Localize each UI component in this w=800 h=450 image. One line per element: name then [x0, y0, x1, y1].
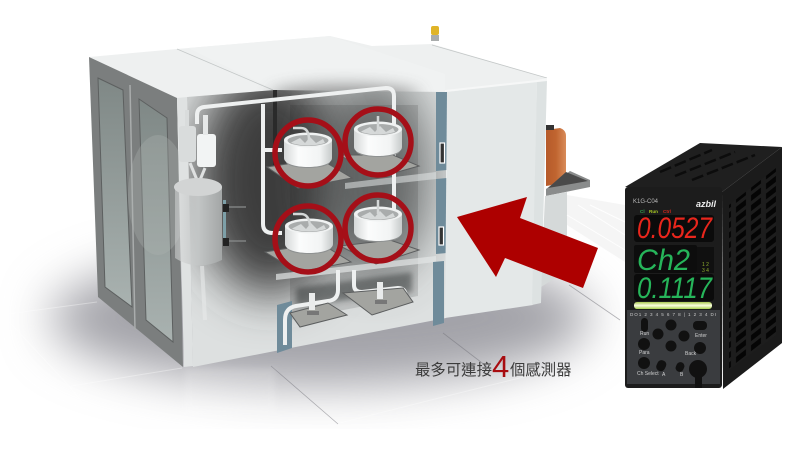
buttons: [638, 318, 707, 388]
button labels: Back: [685, 351, 697, 357]
LED bar: [634, 302, 712, 309]
button labels: B: [680, 372, 684, 378]
mesh grid floor: [567, 195, 625, 262]
button labels: Para: [639, 350, 650, 356]
caption: 個感測器: [510, 360, 572, 379]
controller: 3 4: [702, 268, 709, 274]
button labels: Run: [640, 331, 649, 337]
controller: 0.1117: [637, 272, 713, 305]
yellow beacon: [431, 26, 439, 35]
arrow: [457, 197, 598, 288]
orange tank: [546, 128, 566, 186]
controller: Ch2: [637, 244, 690, 277]
left cabinet doors: [89, 57, 193, 367]
controller top: [625, 143, 782, 192]
sensor inlet pipes: [293, 116, 378, 226]
button labels: [637, 331, 707, 378]
circle: sensor 4: [345, 195, 411, 261]
controller: 1 2: [702, 262, 709, 268]
tray and support: [546, 171, 590, 196]
green channel display: [634, 245, 697, 273]
circle: sensor 3: [275, 206, 341, 272]
green value display: [634, 274, 714, 301]
controller: 0.0527: [637, 212, 713, 245]
floor: [0, 250, 800, 450]
scale labels: DO1 2 3 4 5 6 7 8 | 1 2 3 4 DI: [630, 312, 716, 317]
controller: Run: [649, 209, 658, 214]
caption: [415, 349, 572, 384]
door handles: [440, 143, 444, 163]
button labels: A: [662, 372, 666, 378]
machine body with vignette: [174, 65, 447, 367]
controller: azbil: [696, 199, 717, 209]
circle: sensor 1: [275, 120, 341, 186]
circle: sensor 2: [345, 109, 411, 175]
pipes: [197, 88, 406, 345]
caption: 最多可連接: [415, 361, 492, 379]
machine: rear equipment: [541, 125, 625, 287]
red display: [634, 215, 714, 242]
button labels: Ch Select: [637, 371, 659, 377]
status labels: Cl: [640, 209, 645, 214]
controller: [625, 143, 782, 389]
top shadow: [270, 85, 420, 107]
small fittings: [307, 282, 387, 315]
controller side with vents: [722, 147, 782, 389]
sensors: [284, 122, 402, 254]
caption: 4: [492, 349, 509, 384]
shelves: [345, 172, 436, 189]
machine: top surfaces: [89, 26, 547, 107]
model and brand: K1G-C04: [633, 199, 659, 205]
controller front: [625, 187, 722, 388]
controller: Ctrl: [663, 209, 671, 214]
red highlight circles: [275, 109, 411, 272]
right cabinet face: [445, 78, 547, 318]
filter and tank assembly: [174, 110, 246, 320]
blue pillars: [277, 301, 292, 353]
button labels: Enter: [695, 333, 707, 339]
trays: [265, 155, 419, 327]
